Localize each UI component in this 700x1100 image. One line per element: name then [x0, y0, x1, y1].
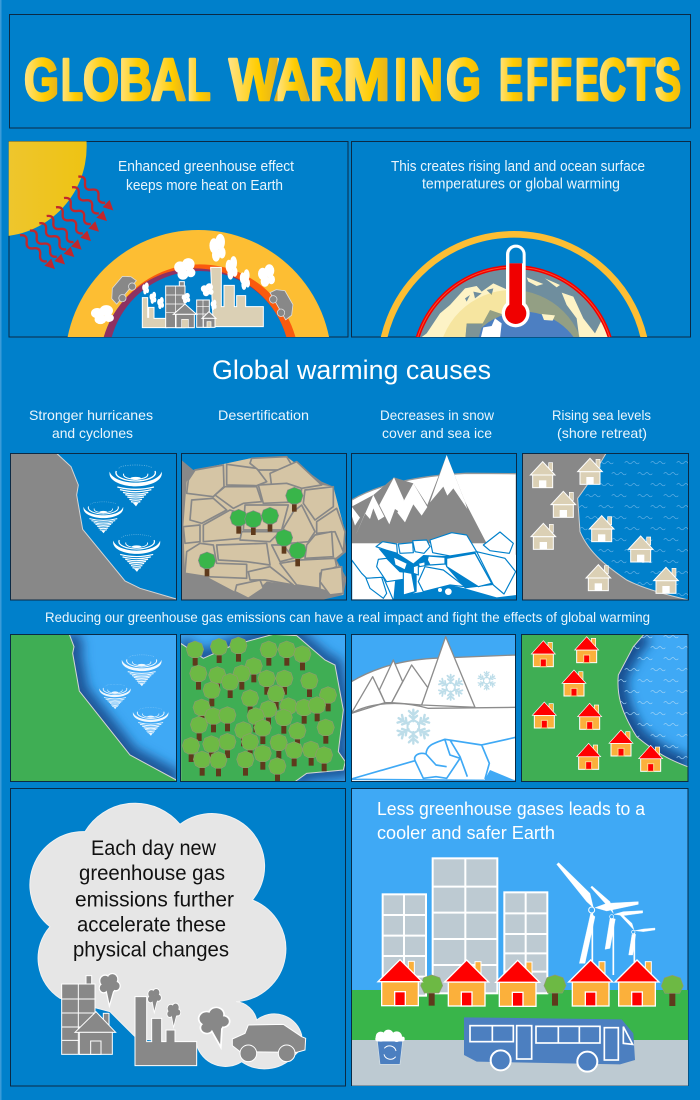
title: A [151, 47, 186, 113]
sea ice [351, 737, 516, 781]
title: B [119, 47, 152, 113]
labels: causes: and cyclones [52, 425, 133, 441]
panel: new emissions [10, 788, 346, 1086]
panel: desertification [181, 453, 347, 600]
cloud [30, 803, 302, 1069]
title: S [655, 47, 681, 113]
icon: houses and trees [378, 960, 683, 1006]
sea [578, 453, 689, 600]
title: L [187, 47, 210, 113]
title: T [627, 47, 655, 113]
title: F [550, 47, 572, 113]
heat rays [20, 175, 114, 270]
cloud text: emissions further [75, 888, 234, 912]
icon: tornadoes [83, 465, 162, 572]
labels: causes: Decreases in snow [380, 407, 495, 423]
cracked earth cells [183, 457, 345, 598]
greenhouse gas arc [68, 230, 329, 337]
icon: trees [198, 487, 306, 576]
panel: enhanced greenhouse effect [8, 141, 348, 338]
icon: snowflakes [396, 671, 496, 744]
icon: thermometer [502, 245, 530, 327]
title: I [394, 47, 407, 113]
title: G [446, 47, 481, 113]
title: O [83, 47, 119, 113]
panel: forest [181, 634, 345, 782]
mountains [352, 455, 487, 543]
icon: cars [106, 272, 298, 322]
labels: causes: Stronger hurricanes [29, 407, 153, 423]
caption: cooler and safer Earth [377, 823, 555, 843]
panel: hurricanes [10, 453, 176, 600]
title: C [599, 47, 626, 113]
caption: This creates rising land and ocean surface [391, 159, 645, 175]
title: G [24, 47, 59, 113]
icon: small tornadoes [99, 655, 168, 736]
labels: causes: Rising sea levels [552, 407, 651, 423]
smoke plumes [100, 974, 234, 1047]
subheading: reducing emissions: Reducing our greenhouse gas emissions can have a real impact and fight the effects of global warming [45, 609, 650, 625]
cloud text: greenhouse gas [79, 862, 225, 885]
icon: wind turbines [557, 863, 655, 975]
caption: Enhanced greenhouse effect [118, 159, 294, 175]
caption: keeps more heat on Earth [126, 178, 283, 194]
labels: causes: Desertification [218, 407, 309, 423]
labels: causes [29, 407, 651, 441]
panel borders [10, 454, 688, 600]
left edge stripe [0, 0, 2, 1100]
title: A [274, 47, 310, 113]
icon: car [232, 1024, 306, 1062]
icon: red houses [531, 637, 663, 771]
title: R [310, 47, 343, 113]
panel: cooler and safer Earth [352, 788, 688, 1086]
title: E [575, 47, 599, 113]
labels: causes: cover and sea ice [382, 425, 492, 441]
caption [118, 159, 294, 194]
title: F [526, 47, 548, 113]
icon: house [75, 1012, 116, 1054]
city [142, 267, 263, 328]
caption [377, 799, 646, 843]
cloud text: Each day new [91, 837, 217, 860]
panel: rising temperatures [351, 141, 691, 338]
atmosphere arc [380, 231, 648, 337]
icon: bus [464, 1017, 635, 1072]
panel: sea level [523, 453, 689, 600]
ground and road [352, 990, 688, 1086]
caption: Less greenhouse gases leads to a [377, 799, 646, 819]
panel: calmer storms [10, 634, 176, 782]
panel: safe shoreline [522, 634, 688, 782]
cloud text: physical changes [73, 938, 229, 962]
earth globe [416, 265, 612, 337]
panel: snow and sea ice [352, 453, 517, 600]
heading: causes: Global warming causes [212, 355, 491, 385]
icon: city buildings [383, 858, 547, 996]
caption: temperatures or global warming [422, 176, 620, 192]
icon: factory [135, 997, 197, 1066]
labels: causes: (shore retreat) [557, 425, 647, 441]
row: restored earth [10, 634, 688, 782]
cloud text [73, 837, 234, 962]
title: L [61, 47, 83, 113]
icon: sun [8, 141, 87, 236]
panel: snow restored [351, 634, 516, 782]
smoke clouds [91, 234, 275, 324]
title panel [10, 14, 690, 128]
ice floes [352, 532, 517, 600]
title: M [343, 47, 390, 113]
caption [391, 159, 645, 192]
snowy mountains [351, 637, 516, 713]
panel borders [10, 634, 688, 782]
row: warming effects [10, 453, 689, 600]
cloud text: accelerate these [77, 914, 226, 936]
icon: office building [62, 976, 95, 1054]
sea [618, 634, 688, 767]
title: E [499, 47, 523, 113]
icon: houses [530, 458, 678, 593]
icon: recycling bin [375, 1030, 405, 1064]
title: W [229, 47, 278, 113]
icon: trees [182, 637, 337, 782]
title: N [410, 47, 443, 113]
